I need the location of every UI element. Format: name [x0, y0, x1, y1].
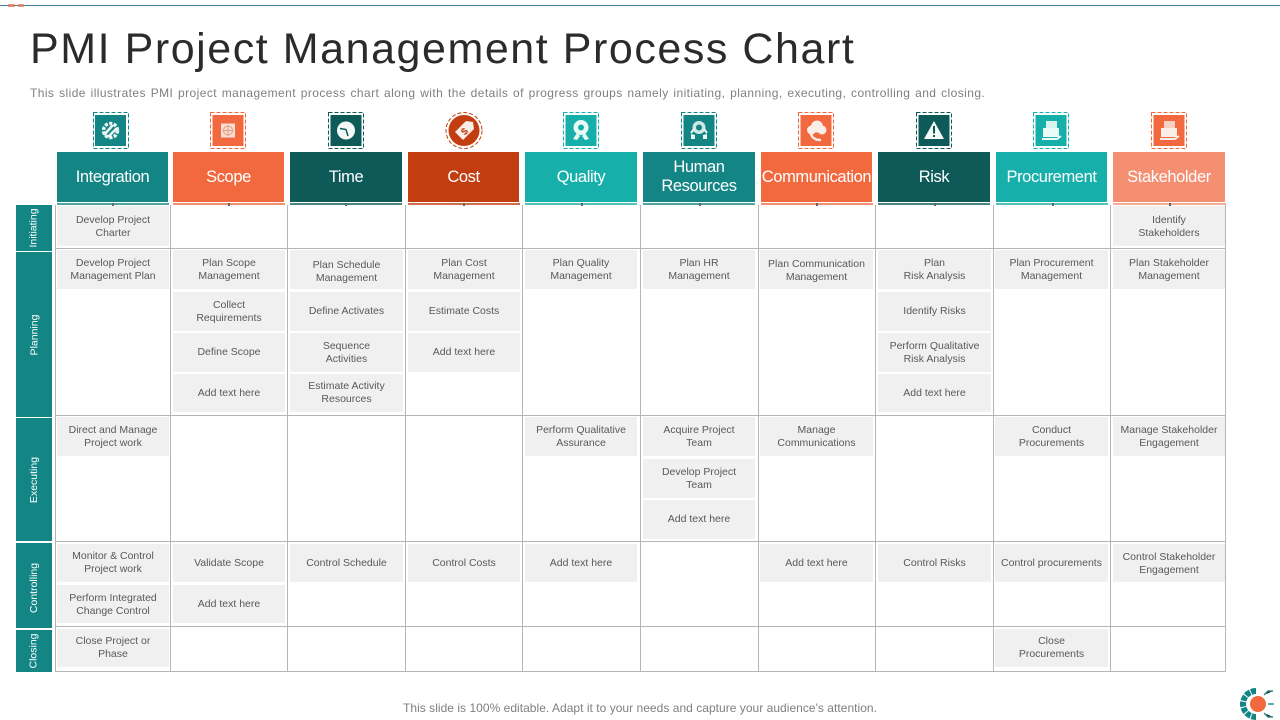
row label: planning	[16, 252, 52, 417]
cell: Conduct	[1032, 424, 1071, 436]
cell: Define Scope	[197, 346, 261, 358]
header: quality	[525, 152, 637, 202]
title: PMI Project Management Process Chart	[30, 25, 855, 73]
cell: Project work	[84, 436, 142, 448]
cell: Validate Scope	[194, 556, 264, 568]
cell: Estimate Activity	[308, 380, 385, 392]
subtitle: This slide illustrates PMI project management process chart along with the details of progress groups namely initiating, planning, executing, controlling and closing.	[30, 86, 985, 100]
header: risk: Risk	[919, 168, 949, 186]
cell: Plan Quality	[553, 256, 609, 268]
cell: Management	[433, 270, 495, 282]
cell	[290, 374, 403, 412]
icon: quality badge	[563, 112, 599, 149]
icon: logo gear	[1240, 688, 1274, 720]
cell: Control Risks	[903, 556, 966, 568]
cell	[408, 544, 520, 582]
cell: Close Project or	[76, 635, 150, 647]
row label: executing: Executing	[28, 456, 40, 503]
cell	[1113, 250, 1225, 289]
cell: Procurements	[1019, 648, 1084, 660]
header: time	[290, 152, 402, 202]
cell: Change Control	[76, 605, 150, 617]
header: communication: Communication	[762, 168, 871, 186]
cell: Plan Stakeholder	[1129, 256, 1209, 268]
cell: Risk Analysis	[904, 270, 965, 282]
header: human resources: Human	[673, 158, 725, 176]
cell	[173, 292, 285, 331]
cell: Plan Cost	[441, 256, 487, 268]
row label: closing	[16, 630, 52, 672]
cell	[408, 292, 520, 331]
header: scope: Scope	[206, 168, 251, 186]
cell: Management	[316, 272, 377, 284]
cell	[408, 333, 520, 372]
cell: Management	[786, 270, 847, 282]
cell	[1113, 544, 1225, 582]
cell	[57, 544, 169, 582]
header: risk	[878, 152, 990, 202]
cell	[995, 417, 1108, 456]
cell	[760, 417, 873, 456]
cell: Activities	[326, 352, 367, 364]
cell	[290, 333, 403, 372]
header: scope	[173, 152, 284, 202]
header: procurement	[996, 152, 1107, 202]
cell: Engagement	[1139, 436, 1199, 448]
cell: Perform Integrated	[69, 592, 157, 604]
cell	[57, 629, 169, 667]
cell: Phase	[98, 648, 128, 660]
row labels	[16, 205, 52, 672]
cell	[643, 500, 755, 539]
cell	[525, 544, 637, 582]
header: procurement: Procurement	[1006, 168, 1097, 186]
cell	[1113, 206, 1225, 246]
cell	[878, 374, 991, 412]
cell	[878, 333, 991, 372]
cell: Add text here	[198, 386, 260, 398]
cell	[643, 250, 755, 289]
cell: Add text here	[550, 556, 612, 568]
header: stakeholder: Stakeholder	[1127, 168, 1211, 186]
icon: stakeholder	[1151, 112, 1187, 149]
cell	[525, 250, 637, 289]
cell: Acquire Project	[663, 424, 735, 436]
cell: Team	[686, 478, 712, 490]
header: human resources: Resources	[661, 177, 737, 195]
cell: Define Activates	[309, 305, 384, 317]
cell: Plan Procurement	[1009, 256, 1094, 268]
cell: Procurements	[1019, 436, 1084, 448]
cell: Plan Schedule	[313, 258, 380, 270]
cell: Monitor & Control	[72, 550, 154, 562]
cell: Develop Project	[76, 256, 150, 268]
cell	[57, 250, 169, 289]
cell: Communications	[777, 436, 856, 448]
cell	[57, 417, 169, 456]
cell: Plan HR	[679, 256, 719, 268]
cell: Collect	[213, 298, 245, 310]
cell	[173, 333, 285, 372]
cell: Charter	[95, 226, 130, 238]
cell	[173, 585, 285, 623]
cell	[760, 544, 873, 582]
cell: Control Costs	[432, 556, 496, 568]
header: integration	[57, 152, 168, 202]
cell	[173, 250, 285, 289]
row label: controlling: Controlling	[28, 562, 40, 613]
cell: Plan	[924, 256, 945, 268]
header: cost	[408, 152, 519, 202]
icon row	[93, 112, 1187, 149]
top rule	[0, 4, 1280, 7]
cell: Add text here	[668, 513, 730, 525]
cell	[1113, 417, 1225, 456]
icon: human resources hands	[681, 112, 717, 149]
cell: Develop Project	[76, 214, 150, 226]
cell: Identify	[1152, 214, 1186, 226]
cell: Assurance	[556, 436, 606, 448]
cell: Control Schedule	[306, 556, 387, 568]
cell: Management	[1021, 270, 1082, 282]
cell	[878, 250, 991, 289]
icon: time clock	[328, 112, 364, 149]
icon: scope target	[210, 112, 246, 149]
icon: procurement	[1033, 112, 1069, 149]
header: cost: Cost	[447, 168, 480, 186]
row label: planning: Planning	[28, 314, 40, 355]
cell: Management	[550, 270, 612, 282]
cell	[995, 629, 1108, 667]
footer note: This slide is 100% editable. Adapt it to your needs and capture your audience's attention.	[403, 701, 877, 715]
cell: Management	[668, 270, 730, 282]
cell: Identify Risks	[903, 305, 966, 317]
cell	[290, 544, 403, 582]
cell	[760, 250, 873, 289]
cell	[878, 544, 991, 582]
cell: Manage	[798, 424, 835, 436]
cell	[173, 544, 285, 582]
row label: closing: Closing	[28, 633, 40, 669]
cell: Sequence	[323, 340, 370, 352]
row label: controlling	[16, 543, 52, 628]
icon: cost tag	[446, 112, 482, 149]
header: stakeholder	[1113, 152, 1225, 202]
cell: Add text here	[785, 556, 848, 568]
cell	[290, 292, 403, 331]
icon: risk warning	[916, 112, 952, 149]
cell	[995, 250, 1108, 289]
column headers	[57, 152, 1225, 202]
row label: initiating	[16, 205, 52, 251]
icon: integration gear	[93, 112, 129, 149]
cell: Engagement	[1139, 564, 1199, 576]
header: time: Time	[329, 168, 363, 186]
cell: Estimate Costs	[429, 305, 499, 317]
cell: Control procurements	[1001, 556, 1102, 568]
cell: Plan Scope	[202, 256, 256, 268]
cell: Perform Qualitative	[536, 424, 626, 436]
cell: Resources	[321, 393, 372, 405]
header: communication	[761, 152, 872, 202]
cell: Team	[686, 436, 712, 448]
cell	[290, 250, 403, 289]
cell: Risk Analysis	[904, 352, 965, 364]
cell: Direct and Manage	[69, 424, 157, 436]
cell: Add text here	[198, 598, 260, 610]
cell: Management	[1138, 270, 1200, 282]
cell: Close	[1038, 635, 1065, 647]
cell	[643, 459, 755, 498]
cell: Perform Qualitative	[890, 340, 979, 352]
cell: Add text here	[433, 346, 495, 358]
cell	[525, 417, 637, 456]
header: integration: Integration	[76, 168, 149, 186]
row label: executing	[16, 418, 52, 541]
cell	[57, 206, 169, 246]
row label: initiating: Initiating	[28, 208, 40, 248]
cell: Management Plan	[70, 270, 156, 282]
cell	[173, 374, 285, 412]
cell: Plan Communication	[768, 258, 865, 270]
cell: Requirements	[196, 312, 262, 324]
cell	[995, 544, 1108, 582]
cell	[408, 250, 520, 289]
icon: cost tag: $	[459, 126, 471, 138]
header underlines	[57, 203, 1226, 206]
cell	[57, 585, 169, 623]
cell: Develop Project	[662, 466, 736, 478]
cell: Control Stakeholder	[1123, 551, 1215, 563]
icon: communication cloud	[798, 112, 834, 149]
cell	[643, 417, 755, 456]
cell: Project work	[84, 563, 142, 575]
cell: Stakeholders	[1138, 226, 1200, 238]
header: quality: Quality	[557, 168, 605, 186]
header: human resources	[643, 152, 755, 202]
cell: Add text here	[903, 386, 966, 398]
cell	[878, 292, 991, 331]
cell: Management	[198, 270, 260, 282]
cell: Manage Stakeholder	[1121, 424, 1217, 436]
